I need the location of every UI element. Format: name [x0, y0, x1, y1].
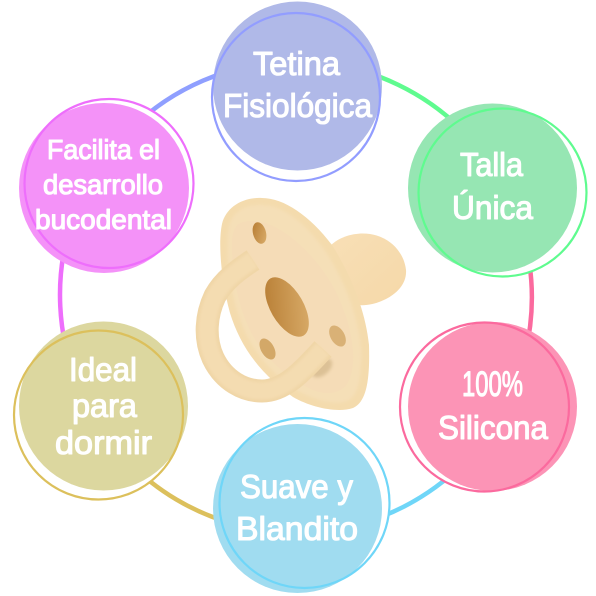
panel: Talla Única [408, 104, 586, 276]
nipple [330, 234, 406, 305]
panel: Tetina Fisiológica [212, 2, 382, 181]
panel: Tetina Fisiológica: Tetina [253, 45, 341, 82]
handle ring [207, 260, 323, 391]
panel: Ideal para dormir: para [72, 387, 138, 424]
panel: Suave y Blandito: Blandito [236, 510, 358, 547]
shield [220, 198, 369, 410]
illustration: pacifier [207, 198, 406, 410]
panel: 100% Silicona: 100% [462, 365, 523, 404]
panel: Suave y Blandito: Suave y [240, 468, 353, 505]
shield inner disc [232, 221, 353, 393]
panel: Ideal para dormir: dormir [55, 424, 152, 461]
panel: Tetina Fisiológica: Fisiológica [223, 87, 373, 124]
shield rim highlight [227, 205, 361, 403]
connecting ring arcs [60, 61, 532, 533]
handle shadow [308, 355, 336, 381]
panel: Facilita el desarrollo bucodental: desarrollo [43, 169, 163, 200]
panel: Ideal para dormir [14, 322, 188, 500]
panel: Facilita el desarrollo bucodental [19, 99, 194, 273]
panel: Ideal para dormir: Ideal [69, 351, 137, 388]
panel: 100% Silicona [400, 322, 577, 492]
panel: Talla Única: Talla [460, 146, 524, 183]
handle ring highlight [207, 260, 323, 391]
panel: Facilita el desarrollo bucodental: bucodental [35, 204, 172, 235]
panel: Talla Única: Única [452, 189, 534, 226]
holes [250, 221, 269, 245]
central hole [256, 270, 318, 344]
panel: Facilita el desarrollo bucodental: Facilita el [47, 134, 160, 165]
panel: Suave y Blandito [213, 418, 390, 593]
panel: 100% Silicona: Silicona [438, 409, 549, 446]
